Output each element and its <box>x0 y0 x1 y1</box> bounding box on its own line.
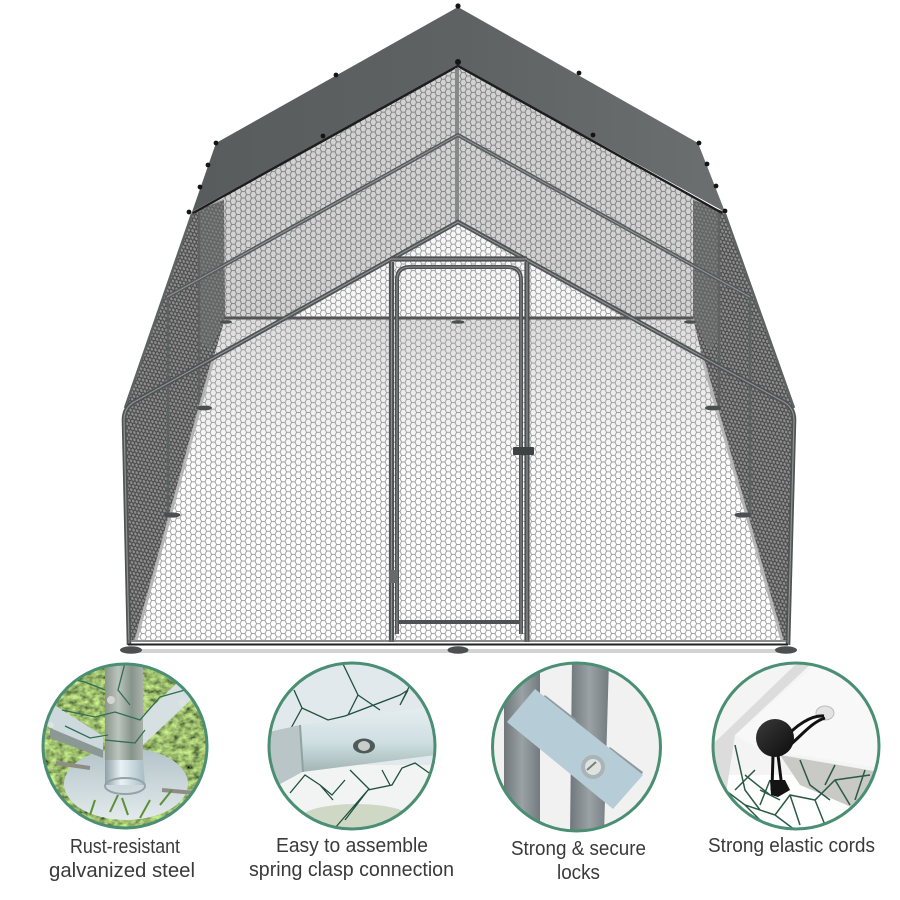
centre roof post <box>455 68 459 222</box>
circle outline <box>269 663 435 829</box>
front arch tube and corner posts <box>124 222 794 645</box>
floor seen through the front mesh <box>135 318 783 640</box>
photo circle: lock plate <box>492 660 662 835</box>
anchor feet <box>120 320 797 654</box>
door latch <box>513 447 534 455</box>
caption: spring clasp connection <box>249 859 454 881</box>
ground shadow <box>138 649 780 653</box>
coop structure <box>120 3 797 654</box>
front face mesh <box>135 318 783 640</box>
left side wall <box>125 198 225 640</box>
photo circle: tube joint <box>269 663 436 832</box>
caption: Strong elastic cords <box>708 835 875 857</box>
caption: galvanized steel <box>49 860 195 882</box>
caption <box>249 835 454 881</box>
roof fasteners <box>187 3 727 214</box>
circle outline <box>713 663 879 829</box>
caption: Rust-resistant <box>70 836 180 858</box>
back gable wall mesh <box>224 66 693 318</box>
base rail <box>128 641 788 644</box>
feature 3: secure locks <box>492 660 662 884</box>
roof cover <box>192 7 725 213</box>
photo circle: bungee ball <box>712 660 880 831</box>
caption: Easy to assemble <box>276 835 428 857</box>
caption <box>49 836 195 882</box>
middle arch tube <box>167 135 750 297</box>
circle outline <box>492 663 660 831</box>
caption: Strong & secure <box>511 838 646 860</box>
feature 2: spring clasp connection <box>249 663 454 881</box>
circle outline <box>43 664 207 828</box>
door frame <box>389 259 527 642</box>
feature 1: galvanized steel <box>40 655 207 882</box>
feature 4: elastic cords <box>708 660 880 857</box>
caption: locks <box>557 862 600 884</box>
photo circle: base plate <box>44 666 206 826</box>
caption <box>511 838 646 884</box>
back base rail <box>224 316 693 320</box>
right side wall <box>693 198 794 640</box>
